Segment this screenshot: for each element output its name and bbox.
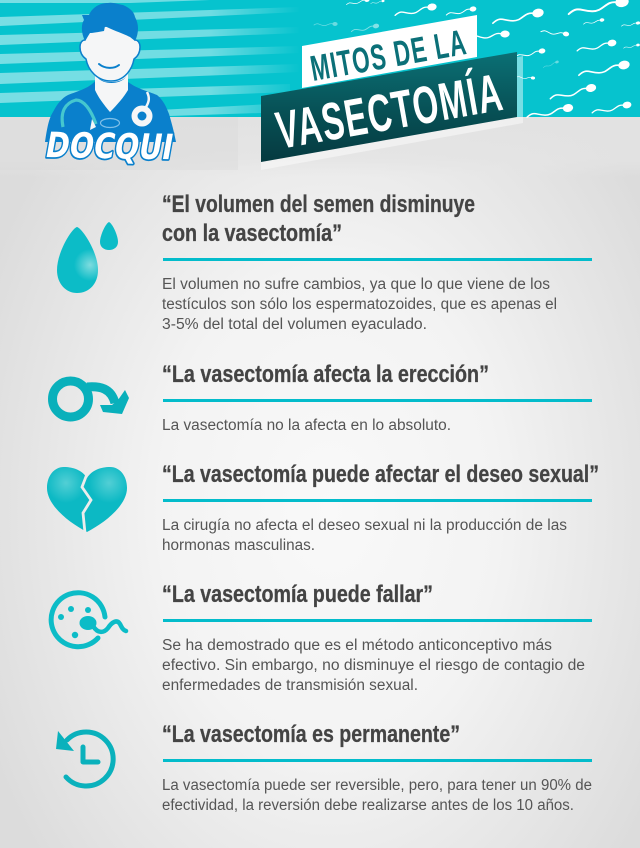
title line two: VASECTOMÍA bbox=[272, 62, 508, 161]
body text: enfermedades de transmisión sexual. bbox=[162, 677, 418, 694]
sperm illustrations bbox=[314, 0, 640, 119]
body text: efectivo. Sin embargo, no disminuye el riesgo de contagio de bbox=[162, 657, 585, 674]
panel: myth 1 bbox=[57, 191, 592, 333]
stethoscope bbox=[62, 92, 152, 130]
heading: “La vasectomía afecta la erección” bbox=[162, 361, 489, 388]
body text: La cirugía no afecta el deseo sexual ni la producción de las bbox=[162, 517, 567, 534]
body text: La vasectomía puede ser reversible, pero, para tener un 90% de bbox=[162, 777, 592, 794]
panel: myth 5 bbox=[56, 721, 592, 814]
heading: “La vasectomía puede fallar” bbox=[162, 581, 433, 608]
panel: myth 2 bbox=[52, 361, 592, 434]
icon: water drops bbox=[57, 222, 118, 293]
body text: testículos son sólo los espermatozoides, que es apenas el bbox=[162, 296, 557, 313]
panel: myth 3 bbox=[47, 461, 599, 554]
body text: La vasectomía no la afecta en lo absoluto. bbox=[162, 417, 451, 434]
body text bbox=[162, 637, 585, 694]
body text: hormonas masculinas. bbox=[162, 537, 315, 554]
body text bbox=[162, 777, 592, 814]
chin shadow bbox=[97, 77, 126, 83]
title shadow strip bbox=[261, 56, 523, 170]
body text bbox=[162, 276, 557, 333]
icon: broken heart bbox=[47, 467, 127, 533]
body text: 3-5% del total del volumen eyaculado. bbox=[162, 316, 427, 333]
heading: “La vasectomía es permanente” bbox=[162, 721, 460, 748]
title bbox=[261, 15, 523, 170]
hair bbox=[82, 3, 138, 41]
heading bbox=[162, 191, 475, 247]
header band bbox=[0, 0, 640, 177]
smile bbox=[99, 64, 119, 68]
body text: efectividad, la reversión debe realizarse antes de los 10 años. bbox=[162, 797, 574, 814]
panel: myth 4 bbox=[51, 581, 592, 694]
body text bbox=[162, 517, 567, 554]
heading: “El volumen del semen disminuye bbox=[162, 191, 475, 218]
face bbox=[80, 26, 140, 81]
heading: con la vasectomía” bbox=[162, 220, 342, 247]
icon: egg and sperm bbox=[51, 593, 126, 647]
icon: clock with counter-clockwise arrow bbox=[56, 731, 113, 786]
icon: male symbol with arrow pointing down bbox=[52, 381, 129, 417]
title white banner bbox=[302, 15, 477, 88]
doctor body bbox=[45, 80, 176, 142]
body text: Se ha demostrado que es el método anticonceptivo más bbox=[162, 637, 552, 654]
body text: El volumen no sufre cambios, ya que lo que viene de los bbox=[162, 276, 550, 293]
title dark banner bbox=[261, 52, 517, 162]
shirt emblem bbox=[100, 118, 120, 128]
brand name: DOCQUI bbox=[42, 125, 177, 168]
title line one: MITOS DE LA bbox=[307, 21, 470, 89]
neck and collar bbox=[95, 74, 128, 112]
logo: Docqui doctor bbox=[42, 3, 177, 168]
